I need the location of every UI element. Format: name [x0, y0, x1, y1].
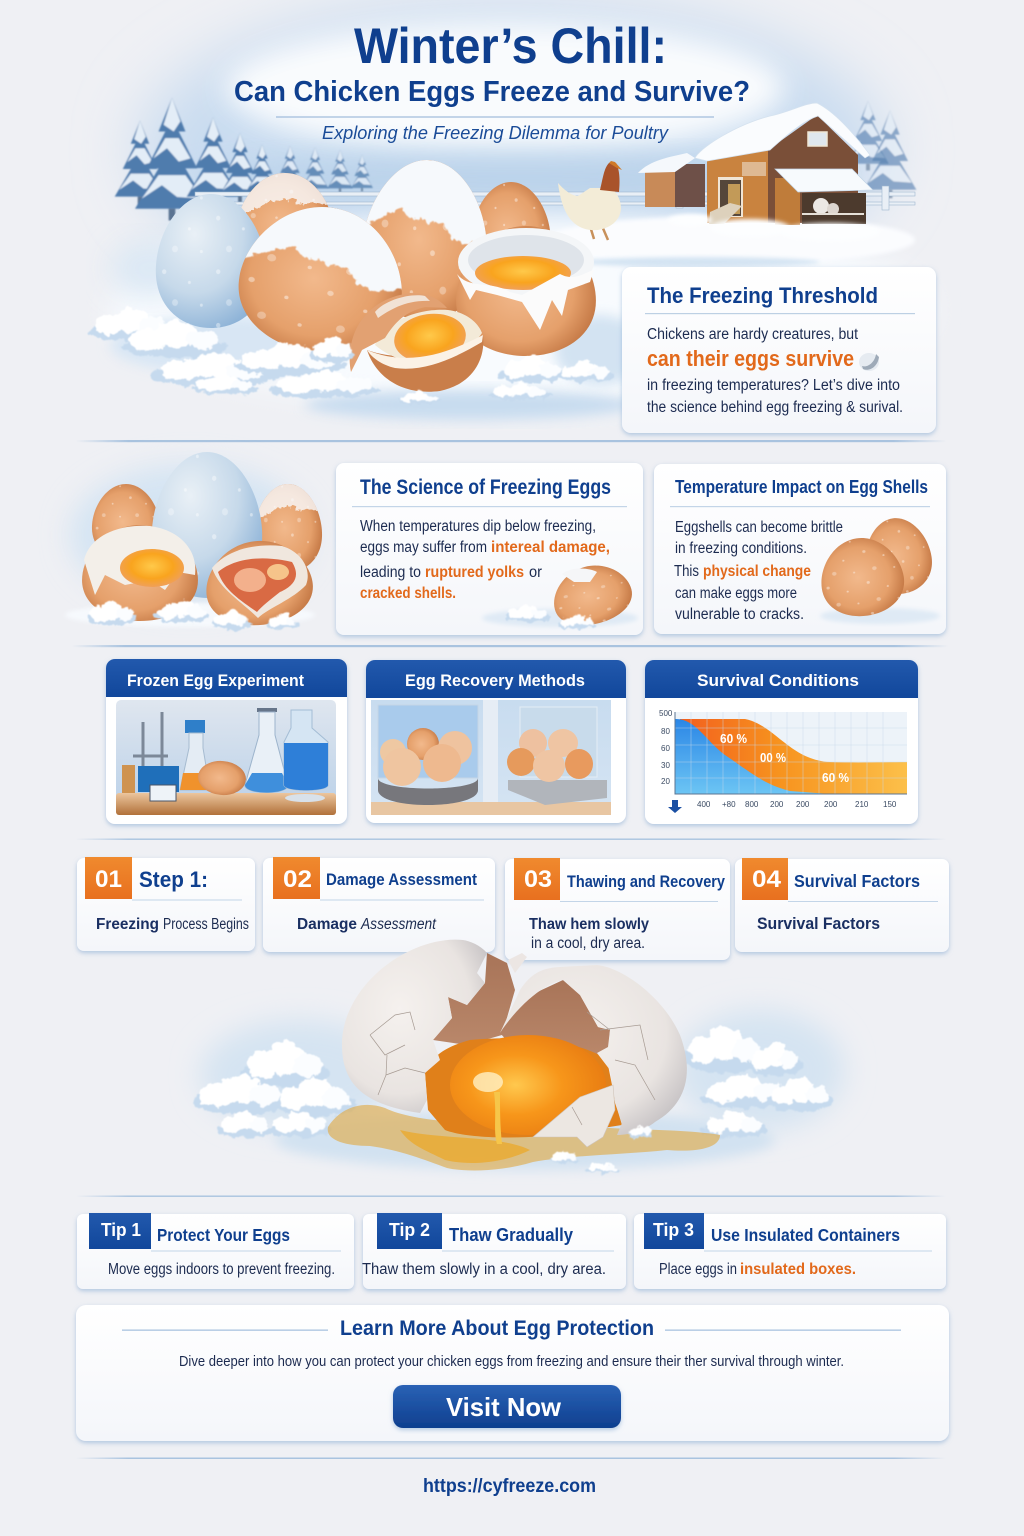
- tip 2 text: Thaw them slowly in a cool, dry area.: [362, 1261, 606, 1278]
- panel: frozen egg experiment: Frozen Egg Experiment: [127, 671, 304, 690]
- panel: egg recovery methods: [366, 660, 626, 823]
- icon: small cracked egg: [859, 353, 879, 371]
- chart: survival area chart: 400: [697, 800, 711, 809]
- panel: step 3: [505, 858, 730, 960]
- temperature body text: [674, 519, 843, 623]
- panel: egg recovery methods: Egg Recovery Methods: [405, 671, 585, 690]
- badge 03: [514, 858, 560, 900]
- threshold body text: [647, 326, 903, 416]
- tip 1 heading: Protect Your Eggs: [157, 1225, 290, 1245]
- call to action heading: Learn More About Egg Protection: [340, 1317, 654, 1340]
- step 2 text: Damage: [297, 916, 357, 933]
- badge 02: 02: [283, 866, 312, 893]
- yolk: [425, 1038, 622, 1138]
- barn: [638, 103, 873, 225]
- step 2 text: [297, 916, 437, 933]
- website url: https://cyfreeze.com: [423, 1476, 596, 1497]
- foreground snow clumps: [88, 308, 613, 404]
- panel: step 2: [263, 857, 495, 952]
- tip 3 badge: Tip 3: [653, 1220, 694, 1240]
- header: frozen egg experiment: [106, 659, 347, 697]
- science body text: ruptured yolks: [425, 564, 524, 581]
- step 3 text: in a cool, dry area.: [531, 935, 645, 952]
- snow piles: [192, 1026, 834, 1138]
- panel: temperature impact on egg shells: [654, 464, 946, 634]
- panel: step 1: [77, 857, 255, 951]
- step 3 text: [529, 916, 649, 952]
- tip 2 badge: [377, 1213, 442, 1249]
- heading: temperature impact: Temperature Impact on Egg Shells: [675, 477, 928, 497]
- panel: tip 2: [362, 1213, 626, 1289]
- temperature body text: can make eggs more: [675, 585, 797, 602]
- yolk puddle: [328, 1105, 720, 1170]
- step 1 heading: Step 1:: [139, 867, 208, 892]
- chart: survival area chart: 60 %: [822, 770, 849, 785]
- chart: survival area chart: 800: [745, 800, 759, 809]
- illustration: frozen and cracked eggs: [65, 452, 329, 630]
- tip 2 badge: Tip 2: [389, 1220, 430, 1240]
- chart: survival area chart: 200: [796, 800, 810, 809]
- subtitle: Can Chicken Eggs Freeze and Survive?: [234, 76, 750, 108]
- pine trees: [115, 98, 916, 220]
- chicken: [558, 161, 622, 240]
- step 3 text: Thaw hem slowly: [529, 916, 649, 933]
- threshold body text: the science behind egg freezing & surival.: [647, 399, 903, 416]
- badge 02: [273, 857, 320, 899]
- chart: survival area chart: 60 %: [720, 731, 747, 746]
- chart: survival area chart: +80: [722, 800, 736, 809]
- panel: survival conditions: Survival Conditions: [697, 671, 859, 690]
- left shell: [342, 940, 487, 1113]
- badge 04: [742, 858, 788, 900]
- button: visit now: [393, 1385, 621, 1428]
- orange survival band: [675, 719, 907, 794]
- cracked egg with yolk, upright: [456, 226, 596, 356]
- tagline: Exploring the Freezing Dilemma for Poultry: [322, 122, 670, 143]
- tip 1 badge: Tip 1: [101, 1220, 141, 1240]
- step 4 text: Survival Factors: [757, 915, 880, 933]
- badge 03: 03: [524, 866, 552, 893]
- call to action text: Dive deeper into how you can protect your chicken eggs from freezing and ensure their ther survival through winter.: [179, 1354, 844, 1370]
- badge 01: [85, 857, 132, 899]
- science body text: cracked shells.: [360, 585, 456, 602]
- frosted eggs: [151, 140, 554, 369]
- broken egg with yolk: [82, 525, 198, 621]
- tip 3 text: Place eggs in: [659, 1261, 737, 1278]
- threshold body text: can their eggs survive: [647, 346, 854, 371]
- chart: survival area chart: 500: [659, 709, 673, 718]
- illustration: lab glassware and egg: [116, 700, 336, 815]
- blue snow ground shading: [110, 240, 645, 420]
- tip 3 badge: [644, 1213, 704, 1249]
- tip 1 badge: [89, 1213, 151, 1249]
- step 3 heading: Thawing and Recovery: [567, 872, 725, 891]
- threshold body text: in freezing temperatures? Let’s dive into: [647, 377, 900, 394]
- tip 3 text: [659, 1261, 856, 1278]
- tip 3 text: insulated boxes.: [740, 1261, 856, 1278]
- science body text: or: [529, 564, 542, 581]
- shell interior: [433, 953, 515, 1045]
- chart: survival area chart: 30: [661, 761, 670, 770]
- badge 01: 01: [95, 866, 122, 893]
- science body text: eggs may suffer from: [360, 539, 487, 556]
- temperature body text: vulnerable to cracks.: [675, 606, 804, 623]
- panel: frozen egg experiment: [106, 659, 347, 824]
- inner white fragment peak: [508, 953, 527, 973]
- button: visit now: Visit Now: [446, 1392, 562, 1422]
- panel: the science of freezing eggs: [336, 463, 643, 635]
- title: Winter’s Chill:: [354, 18, 667, 74]
- icon: down arrow: [668, 800, 682, 813]
- temperature body text: in freezing conditions.: [675, 540, 807, 557]
- hero winter scene illustration: [88, 0, 930, 420]
- snow mounds in front of barn: [580, 214, 880, 267]
- shell cracks: [370, 1012, 655, 1125]
- panel: tip 3: [634, 1213, 946, 1289]
- chart: survival area chart: 200: [770, 800, 784, 809]
- tip 3 heading: Use Insulated Containers: [711, 1225, 900, 1245]
- chart: survival area chart: 210: [855, 800, 869, 809]
- cracked egg, front half with shell flap: [350, 293, 483, 392]
- panel: the freezing threshold: [622, 267, 936, 433]
- science body text: [360, 518, 610, 602]
- chart: survival area chart: 150: [883, 800, 897, 809]
- temperature body text: physical change: [703, 563, 811, 580]
- panel: learn more call to action: [76, 1305, 949, 1441]
- badge 04: 04: [752, 866, 782, 893]
- step 1 text: Freezing: [96, 916, 159, 933]
- step 1 text: Process Begins: [163, 916, 249, 933]
- illustration: large cracked egg with yolk: [192, 940, 845, 1173]
- blue survival area: [675, 719, 830, 794]
- tip 1 text: Move eggs indoors to prevent freezing.: [108, 1261, 335, 1278]
- header: survival conditions: [645, 660, 918, 698]
- heading: science of freezing eggs: The Science of Freezing Eggs: [360, 476, 611, 499]
- illustration: incubators with eggs: [371, 700, 611, 815]
- step 2 text: Assessment: [360, 916, 437, 933]
- broken egg with ruptured yolk: [202, 536, 316, 630]
- science body text: When temperatures dip below freezing,: [360, 518, 596, 535]
- illustration: cracked egg in snow: [482, 556, 641, 634]
- science body text: leading to: [360, 564, 421, 581]
- heading: the freezing threshold: The Freezing Threshold: [647, 283, 878, 308]
- chart: survival area chart: 00 %: [760, 750, 786, 765]
- panel: step 4: [735, 858, 949, 952]
- temperature body text: This: [674, 563, 699, 580]
- right shell: [500, 965, 687, 1135]
- step 2 heading: Damage Assessment: [326, 870, 477, 889]
- header: egg recovery methods: [366, 660, 626, 698]
- chart: survival area chart: [659, 709, 907, 813]
- chart: survival area chart: 80: [661, 727, 670, 736]
- threshold body text: Chickens are hardy creatures, but: [647, 326, 859, 343]
- snow ground behind barn: [545, 216, 915, 264]
- temperature body text: Eggshells can become brittle: [675, 519, 843, 536]
- shell fragment: [533, 1085, 615, 1147]
- illustration: two brown eggs: [812, 513, 940, 624]
- tip 2 heading: Thaw Gradually: [449, 1225, 573, 1245]
- fence: [195, 184, 915, 210]
- chart: survival area chart: 60: [661, 744, 670, 753]
- step 4 heading: Survival Factors: [794, 871, 920, 891]
- panel: tip 1: [77, 1213, 354, 1289]
- science body text: intereal damage,: [491, 539, 610, 556]
- panel: survival conditions: [645, 660, 918, 824]
- step 1 text: [96, 916, 249, 933]
- chart: survival area chart: 200: [824, 800, 838, 809]
- chart: survival area chart: 20: [661, 777, 670, 786]
